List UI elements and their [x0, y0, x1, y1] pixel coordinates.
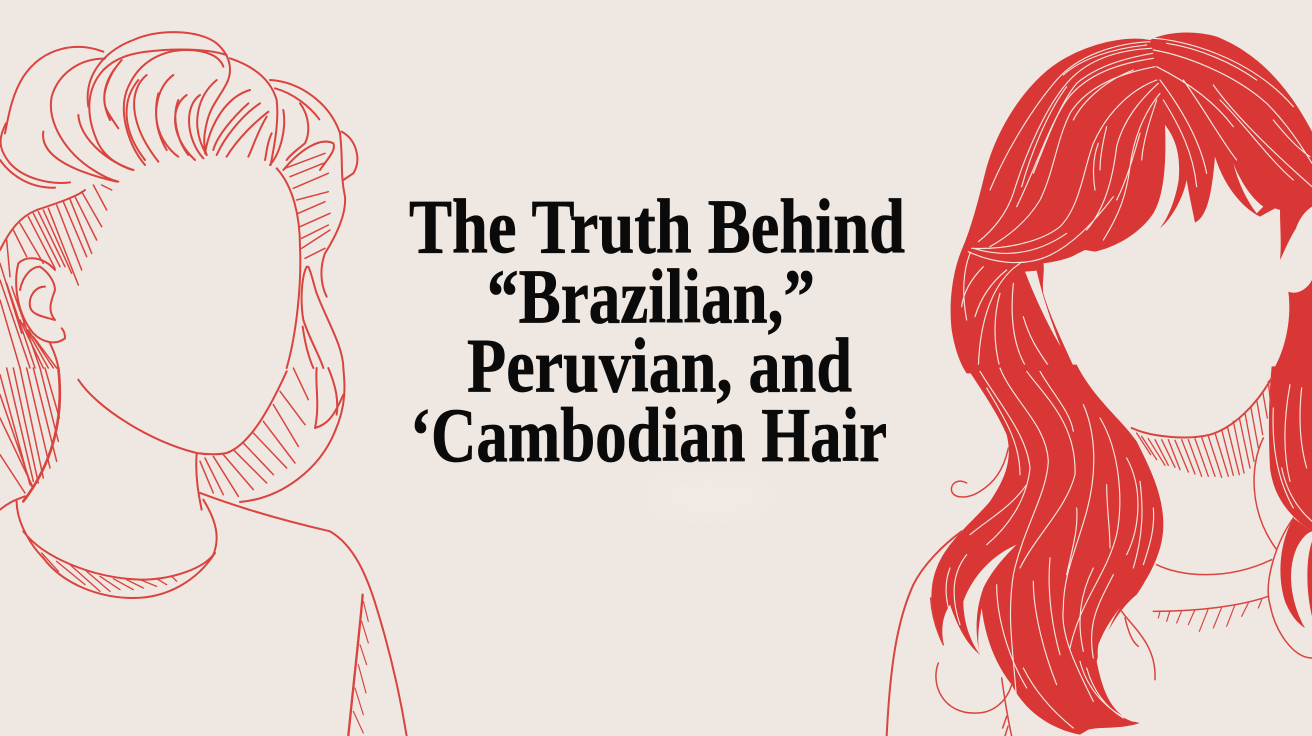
title line 4: ‘Cambodian Hair [410, 392, 887, 478]
right figure: illustrated portrait with long red hair [887, 33, 1312, 736]
title line 3: Peruvian, and [467, 322, 852, 408]
title line 2: “Brazilian,” [487, 254, 815, 340]
left figure: sleeve line [348, 595, 363, 736]
left figure: line-art portrait with short hair [0, 32, 407, 736]
left figure: ear [16, 258, 65, 368]
title line 1: The Truth Behind [409, 184, 905, 270]
left figure: hair and head [0, 32, 357, 368]
left figure: jaw, neck, collar and shoulder [0, 368, 407, 736]
title [409, 184, 905, 478]
right figure: face edge, neck hatching, collar and shoulders [887, 378, 1312, 736]
right figure: long wavy hair [887, 365, 1312, 736]
right figure: crown and fringe [951, 33, 1312, 373]
